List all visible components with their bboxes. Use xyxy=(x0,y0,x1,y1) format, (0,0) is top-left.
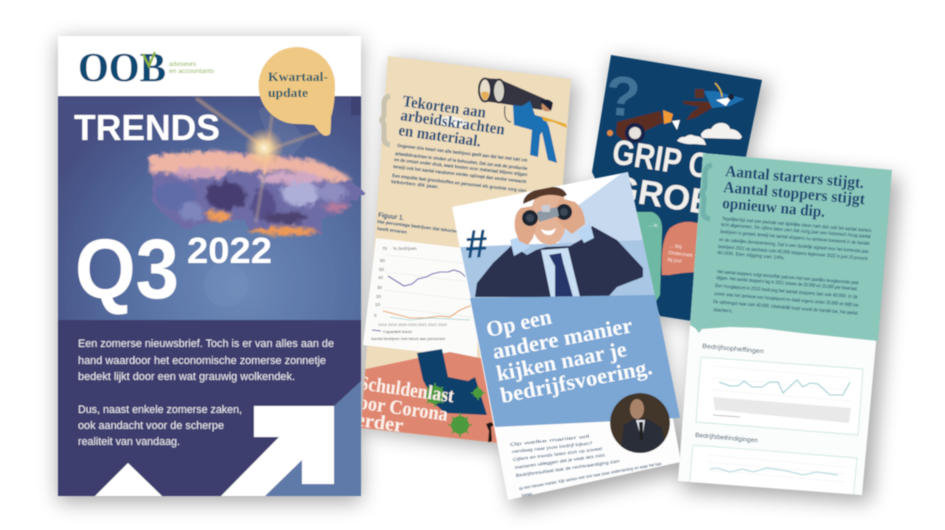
heading: Schuldenlast door Corona verder: verder xyxy=(344,407,405,437)
text block: paragraph two xyxy=(713,269,859,317)
text block: introduction: Een zomerse nieuwsbrief. Toch is er van alles aan de xyxy=(78,338,334,350)
icon: question mark: ? xyxy=(603,63,643,129)
figure caption: Het percentage bedrijven dat tekorten xyxy=(377,219,459,234)
text block: intro: vandaag naar jouw bedrijf kijken? xyxy=(512,440,593,454)
line chart: bedrijfsbeëindigingen xyxy=(689,444,858,494)
panel: blue title band xyxy=(470,295,680,427)
photo: businessman with binoculars xyxy=(452,172,656,299)
text block: paragraph one: bedrijven 2021 op jaarbasis ruim 40.000 stoppers tegenover 2022 in juni 10 procent xyxy=(718,244,868,262)
heading: Grip op groei: GROEI xyxy=(609,168,725,224)
illustration: man with giant binoculars xyxy=(436,78,567,163)
text block: intro: Bedrijfsresultaat laat de rechtvaardiging zien xyxy=(515,458,621,478)
line chart: tekorten: 60 xyxy=(380,258,386,263)
icon: arrow up right xyxy=(221,406,334,496)
decorative translucent shapes xyxy=(258,97,361,156)
line chart: tekorten: 2019 2019 2020 2020 2021 2021 2022 xyxy=(378,322,448,327)
panel: cover background xyxy=(58,96,361,321)
line chart: tekorten: 40 xyxy=(378,275,384,280)
speech bubble: salmon xyxy=(662,222,712,275)
illustration: cloud xyxy=(147,150,364,235)
text block: paragraph one: bedrijven is gestart, terwijl het aantal stoppers nu opnieuw toeneemt in de handel xyxy=(720,229,870,247)
heading: 2022: 2022 xyxy=(187,230,272,271)
text block: paragraph one xyxy=(717,216,872,262)
text block: introduction: arbeidskrachten te vinden of te behouden. Dat zet ook de productie xyxy=(395,151,528,172)
speech bubble: salmon: ... Wij xyxy=(669,243,682,251)
heading: Aantal starters stijgt: opnieuw na dip. xyxy=(722,195,826,221)
text block: paragraph one: licht afgenomen. De cijfers laten zien dat vorig jaar een historisch hoog aantal xyxy=(721,222,871,240)
line chart: tekorten: Capaciteit tekort xyxy=(383,329,413,334)
line chart: tekorten xyxy=(363,238,480,358)
page: Grip op groei (navy) xyxy=(592,55,762,324)
icon: hash: # xyxy=(464,222,489,267)
heading: Grip op groei: GRIP OP xyxy=(610,132,732,189)
page: Op een andere manier (blue) xyxy=(452,172,681,500)
text block: intro xyxy=(510,434,662,498)
text block: paragraph two: zomer was het opnieuw een hoogtepunt en daalt ergens onder 20.000 en blijft toe xyxy=(714,291,859,309)
decorative brace xyxy=(380,96,390,145)
text block: introduction: Dus, naast enkele zomerse zaken, xyxy=(78,404,242,416)
text block: introduction: ook aandacht voor de scherpe xyxy=(78,420,224,432)
line chart: tekorten: Aantal bedrijven met tekort aan personeel xyxy=(371,336,445,341)
heading: Trends: TRENDS xyxy=(74,107,220,148)
text block: introduction: Ongeveer drie kwart van alle bedrijven geeft aan dat het niet lukt om xyxy=(397,143,528,164)
line chart: tekorten: 50 xyxy=(379,267,385,272)
chart heading: Bedrijfsbeëindigingen: Bedrijfsbeëindigingen xyxy=(695,432,759,445)
line chart: tekorten: 20 xyxy=(376,294,382,299)
text block: intro: beter. xyxy=(521,491,534,498)
heading: Op een andere manier: Op een xyxy=(484,304,554,342)
panel: Schuldenlast xyxy=(361,348,498,444)
line chart: tekorten: 10 xyxy=(375,302,381,307)
heading: Schuldenlast door Corona verder: door Corona xyxy=(347,390,449,426)
text block: introduction xyxy=(391,143,528,194)
heading: Tekorten aan arbeidskrachten: Tekorten aan xyxy=(401,93,487,122)
line chart: tekorten: 0 xyxy=(374,313,377,318)
illustration: flying businessman xyxy=(683,83,745,120)
speech bubble: Kwartaal-update xyxy=(258,47,335,136)
panel: cover Trends Q3 2022 xyxy=(58,36,364,496)
text block: introduction: terwijl ook het aantal vacatures verder oploopt dan eerder verwacht xyxy=(393,164,527,185)
speech bubble: green xyxy=(636,212,662,310)
text block: paragraph two: Het aantal stoppers volgt eenzelfde patroon met een jaarlijks terugkerende piek xyxy=(717,269,859,286)
heading: Aantal starters stijgt xyxy=(722,163,866,221)
text block: intro: manieren uitleggen dat je vaak iets mist. xyxy=(514,452,606,470)
text block: paragraph one: 40.000. Een stijging van 14%. xyxy=(717,250,785,261)
speech bubble: green: ... in xyxy=(648,222,658,229)
icon: triangle xyxy=(95,463,162,496)
heading: Q3: Q3 xyxy=(75,222,179,316)
heading: Grip op groei xyxy=(609,132,732,224)
heading: Op een andere manier xyxy=(484,304,654,408)
heading: Op een andere manier: andere manier xyxy=(490,312,635,364)
heading: Schuldenlast door Corona verder xyxy=(361,376,455,432)
speech bubble: Kwartaal-update: Kwartaal- xyxy=(268,69,328,84)
illustration: clouds xyxy=(677,123,742,145)
heading: Tekorten aan arbeidskrachten: en materiaal. xyxy=(397,122,482,151)
text block: intro: Op welke manier wil xyxy=(510,434,590,447)
line chart: tekorten: % bedrijven xyxy=(393,246,417,251)
heading: Aantal starters stijgt: Aantal stoppers stijgt xyxy=(723,179,866,208)
chart heading: Bedrijfsopheffingen: Bedrijfsopheffingen xyxy=(702,343,765,355)
text block: paragraph two: starters. xyxy=(713,307,733,315)
decorative brace xyxy=(700,165,712,219)
text block: paragraph two: De opbrengst naar ruim 40.000. Uiteindelijk loopt vooral de handel toe, het aantal xyxy=(713,299,858,317)
heading: Op een andere manier: bedrijfsvoering. xyxy=(498,354,654,408)
illustration: virus particles xyxy=(423,383,485,437)
text block: introduction: hand waardoor het economische zomerse zonnetje xyxy=(78,355,326,367)
portrait: advisor xyxy=(610,393,670,455)
line chart: tekorten: 70 xyxy=(382,246,388,251)
heading: Schuldenlast door Corona verder: Schuldenlast xyxy=(357,372,456,407)
figure caption: Figuur 1. xyxy=(378,212,404,222)
text block: paragraph two: Een hoogtepunt in 2020 bedroeg het aantal stoppers dan ook 40.000. In de xyxy=(715,283,858,300)
text block: intro: Cijfers en trends laten zich op zoveel xyxy=(513,446,602,462)
text block: introduction: tekorten dit jaar. xyxy=(391,179,439,190)
text block: paragraph two: stijgen. Het aantal stoppers lag in 2021 tussen de 20.000 en 25.000 per kwartaal. xyxy=(716,275,858,292)
heading: Tekorten aan arbeidskrachten: arbeidskrachten xyxy=(399,107,506,139)
figure caption: heeft ervaren xyxy=(377,226,407,235)
line chart: tekorten: 30 xyxy=(377,285,383,290)
logo: OOB: OOB xyxy=(78,44,166,90)
heading: Tekorten aan arbeidskrachten xyxy=(397,93,506,151)
panel: cover text band xyxy=(58,320,361,496)
speech bubble: salmon: Onderzoek xyxy=(668,250,693,259)
line chart: bedrijfsopheffingen xyxy=(696,357,863,435)
figure caption xyxy=(377,212,459,235)
text block: paragraph one: en de zakelijke dienstverlening. Dat is een duidelijk signaal voor het komende jaar xyxy=(719,237,869,255)
text block: introduction: bedekt lijkt door een wat grauwig wolkendek. xyxy=(78,371,295,383)
logo: OOB: en accountants xyxy=(169,69,214,75)
logo: OOB xyxy=(78,44,214,90)
page: Tekorten aan arbeidskrachten (beige) xyxy=(344,56,571,446)
illustration: cannon xyxy=(607,110,680,143)
corner accent xyxy=(265,381,361,496)
speech bubble: salmon: bij jou! xyxy=(667,257,682,265)
logo: OOB: adviseurs xyxy=(169,62,196,68)
text block: introduction: realiteit van vandaag. xyxy=(78,436,180,448)
speech bubble: Kwartaal-update: update xyxy=(268,85,308,100)
text block: paragraph one: Tegelijkertijd met een periode van tijdelijke steun nam dan ook het aantal starters xyxy=(722,216,872,234)
heading: Aantal starters stijgt: Aantal starters stijgt. xyxy=(725,163,865,192)
heading: Op een andere manier: kijken naar je xyxy=(494,336,629,386)
text block: introduction: Een enquête laat grondstoffen en personeel als grootste zorg zien xyxy=(392,173,527,194)
text block: introduction: en de omzet onder druk, want kosten voor materiaal blijven stijgen xyxy=(394,157,528,178)
page: Aantal starters stijgt (teal) xyxy=(678,153,892,510)
icon: sun xyxy=(244,128,284,168)
text block: intro: op een nieuwe manier. Kijk samen met ons naar jouw onderneming en waar het kan xyxy=(518,461,662,491)
soft drop shadows xyxy=(58,40,899,510)
text block: introduction xyxy=(78,338,334,448)
sun rays and glow xyxy=(196,98,320,215)
